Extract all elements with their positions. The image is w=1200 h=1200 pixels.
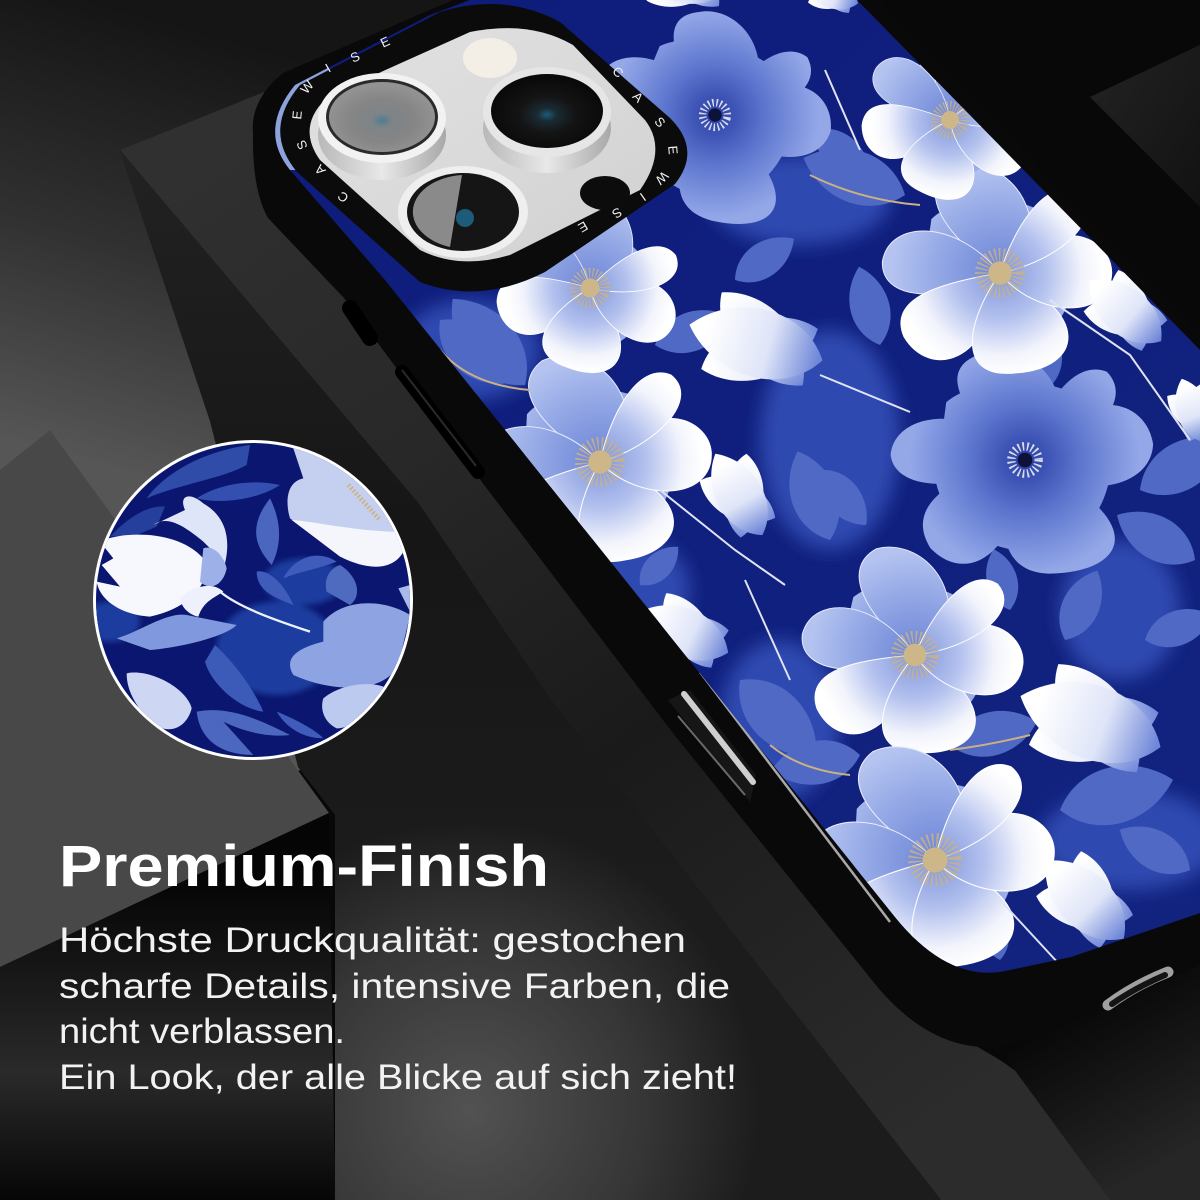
inset upper right flower [288, 448, 405, 567]
side buttons [350, 308, 1168, 1005]
background leaves [425, 117, 1200, 962]
floral print on phone back [250, 0, 1200, 1000]
inset white stem [220, 592, 310, 632]
bumper brand text: S [293, 138, 311, 152]
inset white tulip [97, 496, 227, 617]
bumper brand text: A [311, 162, 329, 178]
inset bottom left blossom [127, 673, 192, 729]
phone case body [253, 0, 1200, 1047]
body text: Höchste Druckqualität: gestochen [59, 921, 686, 960]
bumper brand text: S [348, 48, 362, 66]
bumper brand text: A [630, 89, 647, 106]
camera glass plate [310, 28, 655, 261]
bumper brand text: I [323, 61, 333, 75]
lens: lower [398, 166, 528, 258]
body text: nicht verblassen. [59, 1012, 345, 1051]
blue flowers [891, 350, 1153, 574]
inset lower right flower [290, 585, 410, 728]
body text: scharfe Details, intensive Farben, die [59, 967, 730, 1006]
inset lower petal [117, 615, 237, 650]
tulips [690, 292, 822, 386]
bumper brand text: W [652, 168, 672, 188]
stems [660, 70, 1190, 965]
sensor [580, 176, 630, 210]
bumper brand text: W [297, 77, 317, 97]
blurred blue wash [400, 155, 1200, 890]
bumper brand text: E [665, 145, 681, 155]
pale strip at top left [275, 68, 329, 170]
gold stems [440, 175, 1030, 775]
bumper brand text: C [609, 63, 627, 81]
body text: Ein Look, der alle Blicke auf sich zieht! [59, 1058, 737, 1097]
white and blue flowers [882, 164, 1112, 373]
circular detail inset [80, 435, 420, 765]
bumper brand text [289, 33, 681, 236]
lens: upper left [318, 73, 446, 180]
bumper brand text: C [335, 188, 351, 206]
inset leaves [110, 445, 357, 755]
glossy rim highlight [700, 672, 890, 922]
bumper brand text: I [637, 190, 649, 204]
bumper brand text: S [651, 114, 669, 130]
flash [463, 38, 517, 78]
bumper brand text: E [378, 33, 392, 51]
body text [59, 921, 737, 1097]
title: Premium-Finish [59, 834, 549, 899]
lens: right [483, 67, 611, 173]
bumper brand text: E [289, 110, 305, 120]
bumper brand text: E [575, 218, 591, 236]
camera bumper [280, 4, 687, 291]
bumper brand text: S [609, 204, 625, 222]
inset blue wash [80, 558, 343, 695]
